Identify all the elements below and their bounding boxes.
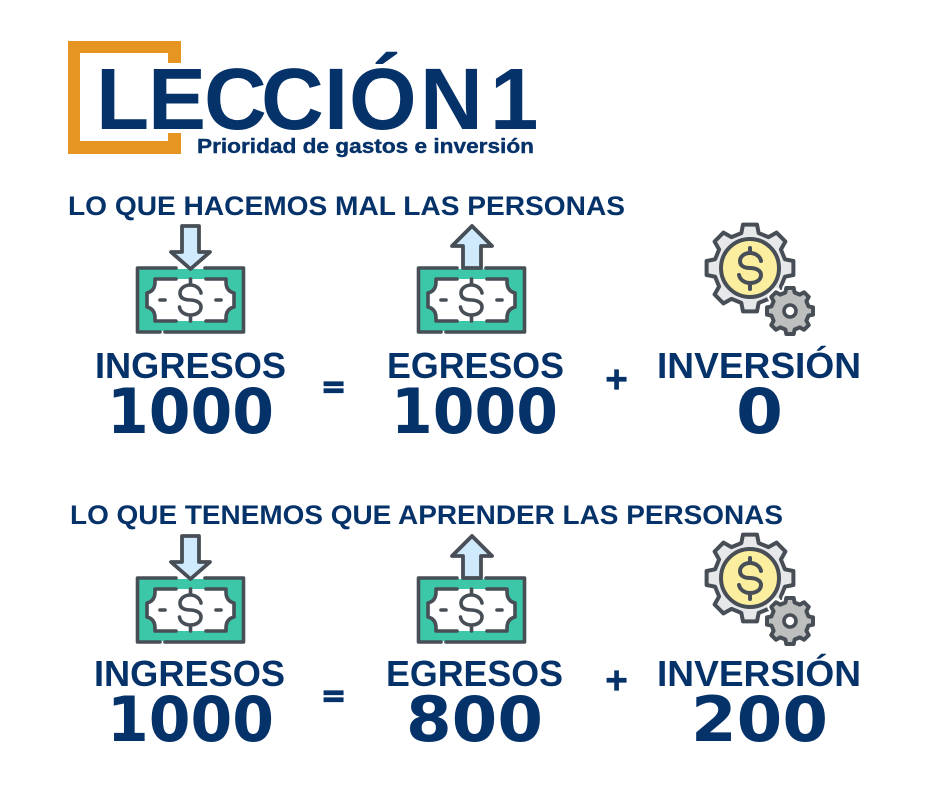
label: inversion: INVERSIÓN (657, 344, 861, 386)
value: ingresos 1000: 1000 (107, 375, 274, 448)
plus sign, second row: + (604, 663, 629, 698)
subtitle: Prioridad de gastos e inversión (197, 136, 534, 158)
icon: expense banknote with up arrow, second row (418, 536, 524, 642)
value: inversion 0: 0 (736, 375, 783, 448)
label: ingresos: INGRESOS (95, 345, 286, 386)
value: ingresos 1000, second row: 1000 (107, 683, 274, 756)
plus sign: + (604, 362, 629, 397)
heading: first scenario: LO QUE HACEMOS MAL LAS PERSONAS (68, 191, 625, 221)
value: egresos 1000: 1000 (391, 375, 558, 448)
equals sign: = (321, 370, 346, 405)
title: LECCIÓN 1 (96, 51, 538, 148)
label: ingresos, second row: INGRESOS (94, 653, 285, 694)
value: egresos 800: 800 (406, 683, 543, 756)
logo: orange bracket frame (68, 41, 181, 154)
value: inversion 200: 200 (691, 683, 828, 756)
icon: income banknote with down arrow (138, 226, 244, 332)
icon: investment gears with dollar, second row (707, 535, 813, 644)
icon: income banknote with down arrow, second row (138, 536, 244, 642)
label: egresos: EGRESOS (387, 345, 564, 386)
heading: second scenario: LO QUE TENEMOS QUE APRENDER LAS PERSONAS (70, 500, 783, 530)
icon: expense banknote with up arrow (418, 226, 524, 332)
label: inversion, second row: INVERSIÓN (657, 652, 861, 694)
equals sign, second row: = (321, 679, 346, 714)
icon: investment gears with dollar (707, 225, 813, 334)
label: egresos, second row: EGRESOS (386, 653, 563, 694)
